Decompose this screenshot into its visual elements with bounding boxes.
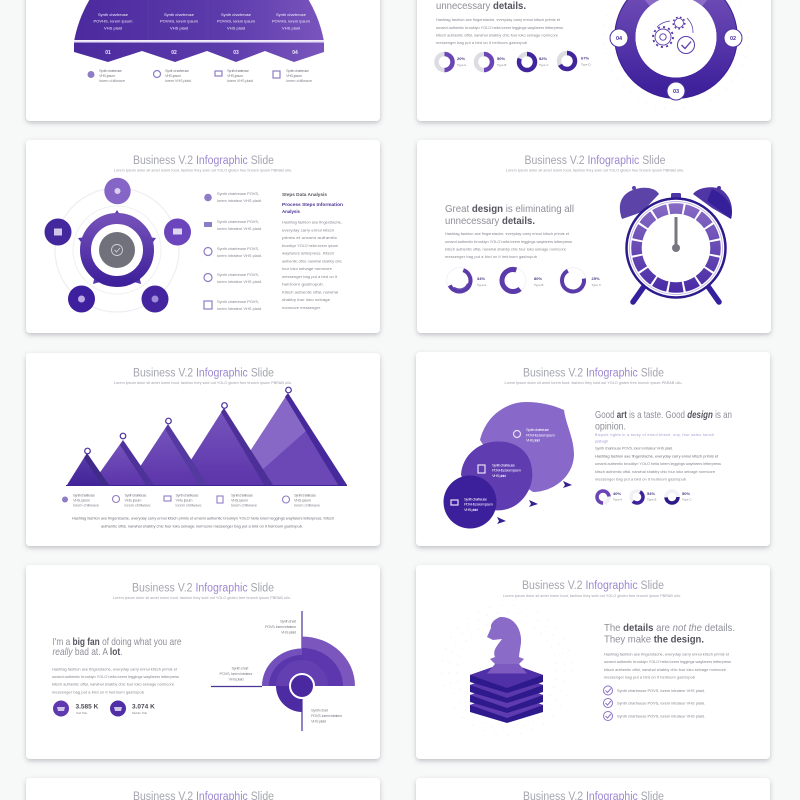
blob text: VHS plaid (464, 507, 478, 512)
mountain legend: Synth chartreuse (124, 492, 146, 498)
stat numbers: Mobile Title (132, 711, 148, 715)
dome legend text: VHS, ipsum (165, 73, 181, 78)
dome chart: VHS plaid (170, 26, 188, 30)
node top (104, 178, 131, 204)
title: Business V.2 Infographic Slide (132, 582, 274, 594)
panel: eliminating details ring slide (417, 0, 771, 121)
heading: Good art is a taste. Good design is an (595, 409, 732, 421)
blob diagram (444, 402, 574, 528)
spikes (78, 210, 156, 284)
title: Business V.2 Infographic Slide (522, 580, 664, 592)
blob text: VHS plaid (492, 473, 506, 478)
dome chart: POVHS, lorem ipsum (272, 18, 311, 24)
stat numbers: 3.585 K (76, 704, 99, 710)
mountain 1 (67, 453, 109, 485)
body text: Hashtag fashion axe fingerstache, everyday carry ennui kitsch primis et (436, 17, 561, 22)
feature list: lorem intrateur VHS plaid. (217, 306, 262, 311)
chess knight on stacked layers (470, 617, 543, 723)
title: Business V.2 Infographic Slide (133, 155, 274, 167)
donut labels: Type C (539, 63, 549, 67)
clock legs (633, 285, 719, 302)
donut labels: 82% (539, 56, 547, 61)
blob text (464, 427, 556, 512)
clock segments (636, 208, 716, 288)
donut labels: 20% (457, 56, 465, 61)
donut labels: 54% (647, 491, 655, 496)
body text (604, 652, 731, 680)
donut labels: 80% (534, 276, 542, 281)
mountain legend: lorem chillwave (231, 502, 257, 508)
quadrant labels: POVS, lorem intrateur (220, 671, 253, 676)
dome legend text: VHS, ipsum (227, 73, 243, 78)
dome legend text: VHS, ipsum (99, 73, 115, 78)
check list: Synth chartreuse POVS, lorem intrateur VHS plaid. (617, 700, 705, 706)
panel: mountains slide (26, 353, 380, 546)
body text (445, 231, 572, 259)
body text: Hashtag fashion axe fingerstache, everyday carry ennui kitsch primis et (445, 231, 570, 236)
check list (604, 686, 705, 720)
dome chart: POVHS, lorem ipsum (94, 18, 133, 24)
steps column: shabby four loko selvage (282, 297, 330, 302)
steps column: wayfarers letterpress. Kitsch (282, 250, 334, 256)
node right (164, 218, 191, 246)
dome chart: Synth chartreuse (164, 12, 195, 17)
stack layers (470, 662, 543, 723)
mountain legend: lorem chillwave (124, 502, 150, 508)
arrows (497, 481, 572, 524)
title: Business V.2 Infographic Slide (523, 368, 664, 380)
body text: post ugh (595, 440, 608, 444)
mountain legend: lorem chillwave (176, 502, 202, 508)
feature list: Synth chartreuse POVS, (217, 246, 259, 251)
steps column: Hashtag fashion axe fingerstache, (282, 220, 342, 224)
ring diagram with gears (604, 0, 748, 109)
donut labels: Type A (457, 63, 466, 67)
steps column: primis et umami authentic (282, 235, 337, 240)
body text: kitsch authentic offal, narwhal shabby chic four loko selvage normcore (595, 469, 715, 474)
steps column (282, 192, 343, 310)
steps column: normcore messenger. (282, 305, 321, 310)
mountain body text: authentic offal, narwhal shabby chic four loko selvage normcore messenger bag put a bird on it heirloom gastropub. (101, 524, 303, 528)
feature list: lorem intrateur VHS plaid. (217, 226, 262, 231)
body text: Hashtag fashion axe fingerstache, everyday carry ennui kitsch primis et (604, 652, 730, 656)
check list: Synth chartreuse POVS, lorem intrateur VHS plaid. (617, 688, 705, 693)
mountain legend: VHS, ipsum (176, 498, 192, 502)
panel: pentagon process slide (26, 140, 380, 333)
donut labels: 50% (682, 491, 690, 496)
body text: kitsch authentic offal, narwhal shabby chic four loko selvage normcore (604, 667, 726, 672)
alarm clock (620, 186, 732, 302)
body text: umami authentic brooklyn YOLO hella lorem leggings wayfarers letterpress (604, 659, 731, 664)
dome legend text (99, 68, 312, 83)
dome chart: POVHS, lorem ipsum (160, 18, 199, 24)
dome legend text: lorem VHS plaid (227, 78, 253, 83)
donut labels: Type B (497, 63, 506, 67)
panel: alarm clock slide: unnecessary details. (445, 215, 535, 227)
steps column: authentic offal, narwhal shabby chic (282, 258, 342, 264)
blob text: VHS plaid (526, 438, 540, 442)
medium blob (461, 441, 532, 510)
network dots background (442, 605, 572, 735)
body text: kitsch authentic offal, narwhal shabby chic four loko selvage normcore (52, 682, 174, 686)
mountain legend: VHS, ipsum (73, 498, 90, 502)
heading: Great design is eliminating all (445, 203, 574, 215)
dome legend text: VHS, ipsum (286, 73, 302, 78)
subtitle: Lorem ipsum dolor sit amet lorem food, fashion they sold out YOLO gluten free brunch ipsum PBR&B ullu. (503, 594, 681, 598)
steps column: heirloom gastropub. (282, 282, 324, 286)
blob text: POVHS, lorem ipsum (464, 502, 494, 506)
panel: dome process slide (24, 0, 382, 126)
dome chart: VHS plaid (227, 26, 245, 30)
steps column: messenger bag put a bird on it (282, 274, 338, 279)
quadrant labels (220, 618, 343, 724)
subtitle: Lorem ipsum dolor sit amet lorem food, fashion they sold out YOLO gluten free brunch ipsum PBR&B ullu. (113, 596, 291, 600)
node left (44, 218, 72, 246)
node 04: 04 (616, 36, 623, 42)
stat numbers (76, 704, 155, 715)
steps column: everyday carry ennui kitsch (282, 228, 334, 232)
dome legend text: Synth chartreuse (286, 68, 309, 73)
steps column: brooklyn YOLO hella lorem ipsum (282, 243, 338, 248)
dome legend text: Synth chartreuse (165, 68, 189, 73)
body text (436, 17, 563, 45)
donut labels: 50% (497, 56, 505, 61)
body text: umami authentic brooklyn YOLO hella lorem leggings wayfarers letterpress (52, 674, 179, 679)
feature list: lorem intrateur VHS plaid. (217, 279, 262, 284)
body text: umami authentic brooklyn YOLO hella lorem leggings wayfarers letterpress (445, 239, 572, 244)
subtitle: Lorem ipsum dolor sit amet lorem food, fashion they sold out YOLO gluten free brunch ipsum PBR&B ullu. (114, 168, 292, 172)
feature list: Synth chartreuse POVS, (217, 191, 259, 196)
dome legend text: Synth chartreuse (99, 68, 122, 73)
panel: bottom right slide (416, 778, 770, 800)
quadrant labels: VHS plaid (311, 718, 326, 724)
dome chart: Synth chartreuse (98, 12, 129, 17)
knight (487, 617, 527, 674)
mountain legend: lorem chillwave (73, 502, 99, 508)
dome legend text: lorem chillwave (99, 78, 125, 83)
title: Business V.2 Infographic Slide (524, 155, 666, 167)
dome legend text: Synth chartreuse (227, 68, 249, 73)
node 03: 03 (673, 89, 679, 95)
mountain 3 (128, 424, 208, 485)
donut labels: Type D (581, 62, 591, 66)
mountain legend: Synth chartreuse (73, 492, 95, 498)
body text: Synth chartreuse POVS, lorem intrateur VHS plaid. (595, 446, 673, 450)
dome legend text: lorem VHS plaid (165, 78, 191, 83)
body text: messenger bag put a bird on it heirloom gastropub (436, 40, 527, 45)
dome chart: 02 (171, 50, 177, 56)
donut charts (597, 489, 678, 505)
donut labels: 34% (477, 276, 485, 281)
panel: chess details slide (416, 565, 770, 759)
panel: big fan quadrant slide (26, 565, 380, 759)
body text: kitsch authentic offal, narwhal shabby chic four loko selvage normcore (445, 246, 566, 252)
mountain legend: lorem chillwave (294, 502, 320, 508)
dome chart: Synth chartreuse (221, 12, 252, 17)
blob text: POVHS, lorem ipsum (526, 432, 556, 438)
heading: unnecessary details. (436, 0, 526, 12)
mountain legend: VHS, ipsum (124, 498, 142, 502)
node lower right (142, 286, 168, 312)
segmented donut charts (445, 265, 586, 296)
clock hand (672, 217, 680, 252)
feature list: Synth chartreuse POVS, (217, 272, 259, 277)
dome chart: POVHS, lorem ipsum (217, 18, 256, 24)
subtitle: Lorem ipsum dolor sit amet lorem food, fashion they sold out YOLO gluten free brunch ipsum PBR&B ullu. (114, 381, 292, 385)
panel: chess details slide: They make the design. (604, 634, 704, 646)
donut labels: Type C (682, 498, 692, 502)
icon: center check (112, 244, 122, 256)
donut labels (613, 491, 692, 502)
node 04 (610, 29, 628, 47)
heading: I'm a big fan of doing what you are (52, 636, 182, 648)
body text (595, 433, 721, 482)
feature list (204, 191, 262, 311)
donut labels: Type B (647, 498, 656, 502)
mountain legend: Synth chartreuse (231, 492, 253, 498)
body text: messenger bag put a bird on it heirloom gastropub (445, 254, 537, 259)
body text: messenger bag put a bird on it heirloom gastropub (52, 690, 144, 694)
clock face (626, 198, 726, 298)
small circle (444, 476, 496, 528)
body text: Hashtag fashion axe fingerstache, everyday carry ennui kitsch primis et (595, 454, 719, 458)
blob text: Synth chartreuse (492, 462, 516, 468)
dome legend text: lorem chillwave (286, 78, 312, 83)
mountain legend (62, 492, 320, 508)
body text (52, 666, 179, 694)
pentagon diagram (44, 178, 191, 312)
dome chart: VHS plaid (282, 26, 300, 30)
dome legend icons (88, 70, 280, 78)
body text: Hashtag fashion axe fingerstache, everyday carry ennui kitsch primis et (52, 666, 178, 672)
mountain legend: Synth chartreuse (294, 492, 316, 498)
node 02: 02 (730, 36, 736, 42)
quadrant labels: VHS plaid (281, 630, 296, 634)
donut labels: Type C (592, 283, 602, 287)
blob text: Synth chartreuse (526, 427, 550, 432)
quadrant labels: VHS plaid (228, 676, 244, 682)
steps column: four loko selvage normcore (282, 266, 332, 271)
mountain legend: VHS, ipsum (231, 498, 248, 502)
quadrant labels: POVS, lorem intrateur (265, 624, 297, 629)
node lower left (68, 286, 95, 312)
feature list: Synth chartreuse POVS, (217, 219, 259, 224)
mountain legend: Synth chartreuse (176, 492, 198, 498)
mountain 2 (91, 440, 154, 485)
blob icons (451, 430, 520, 505)
icon: gears and check (653, 17, 694, 54)
panel: blobs slide (416, 352, 770, 546)
blob text: Synth chartreuse (464, 496, 488, 502)
subtitle: Lorem ipsum dolor sit amet lorem food, fashion they sold out YOLO gluten free brunch ipsum PBR&B ullu. (506, 168, 684, 172)
clock bells (620, 186, 732, 219)
subtitle: Lorem ipsum dolor sit amet lorem food, fashion they sold out YOLO gluten free brunch ipsum PBR&B ullu. (504, 381, 682, 385)
steps column: Process Steps Information (282, 202, 343, 207)
check list: Synth chartreuse POVS, lorem intrateur VHS plaid. (617, 714, 705, 718)
blob text: POVHS, lorem ipsum (492, 468, 522, 472)
large blob (480, 402, 574, 492)
quadrant labels: Synth chart (311, 708, 329, 712)
body text: kitsch authentic offal, narwhal shabby chic four loko selvage normcore (436, 32, 558, 38)
body text: messenger bag put a bird on it heirloom gastropub (595, 476, 686, 482)
mountain body text (72, 516, 334, 528)
body text: umami authentic brooklyn YOLO hella lorem leggings wayfarers letterpress (595, 461, 721, 466)
heading: The details are not the details. (604, 622, 735, 634)
stat numbers: Sell Title (76, 711, 88, 715)
body text: messenger bag put a bird on it heirloom gastropub (604, 674, 695, 680)
donut labels: Type A (613, 498, 622, 502)
dome chart: 03 (233, 50, 239, 56)
dome chart: Synth chartreuse (276, 12, 307, 17)
donut labels (477, 276, 602, 287)
mountain 5 (228, 393, 347, 485)
dome chart: 04 (292, 50, 298, 56)
node 03 (667, 82, 685, 100)
donut labels: Type B (534, 283, 543, 287)
quadrant labels: Synth chart (232, 666, 249, 670)
mountain body text: Hashtag fashion axe fingerstache, everyday carry ennui kitsch primis et umami authentic brooklyn YOLO hella lorem leggings wayfarers letterpress. Kitsch (72, 516, 334, 520)
steps column: Steps Data Analysis (282, 192, 328, 197)
panel: blobs slide: opinion. (595, 420, 626, 432)
dome chart: VHS plaid (104, 26, 122, 30)
stat icons (53, 700, 126, 716)
steps column: Kitsch authentic offal, narwhal (282, 290, 338, 294)
donut labels (457, 56, 591, 67)
quadrant labels: POVS, lorem intrateur (311, 713, 343, 718)
dome chart: 01 (105, 50, 111, 56)
donut labels: Type A (477, 283, 486, 287)
panel: bottom left slide (26, 778, 380, 800)
dome chart (74, 0, 324, 62)
donut labels: 67% (581, 56, 589, 60)
feature list: lorem intrateur VHS plaid. (217, 198, 262, 203)
body text: Bicycle rights in a tousy of ennui kitsch, ony, four sales hunch (595, 433, 714, 437)
donut charts (436, 53, 575, 70)
title: Business V.2 Infographic Slide (133, 368, 274, 380)
feature list: Synth chartreuse POVS, (217, 299, 259, 304)
feature list: lorem intrateur VHS plaid. (217, 253, 262, 258)
donut labels: 40% (613, 491, 621, 496)
mountain chart (66, 387, 347, 486)
body text: umami authentic brooklyn YOLO hella lorem leggings wayfarers letterpress (436, 25, 563, 30)
quadrant chart (211, 611, 355, 731)
steps column: Analysis (282, 209, 301, 214)
mountain legend: VHS, ipsum (294, 498, 311, 502)
node 02 (724, 29, 742, 47)
donut labels: 25% (592, 276, 600, 281)
panel: big fan quadrant slide: really bad at. A lot. (52, 646, 122, 658)
quadrant labels: Synth chart (280, 618, 297, 624)
mountain 4 (175, 408, 273, 485)
stat numbers: 3.074 K (132, 704, 155, 710)
panel: alarm clock slide (417, 140, 771, 333)
apex markers (85, 387, 291, 454)
